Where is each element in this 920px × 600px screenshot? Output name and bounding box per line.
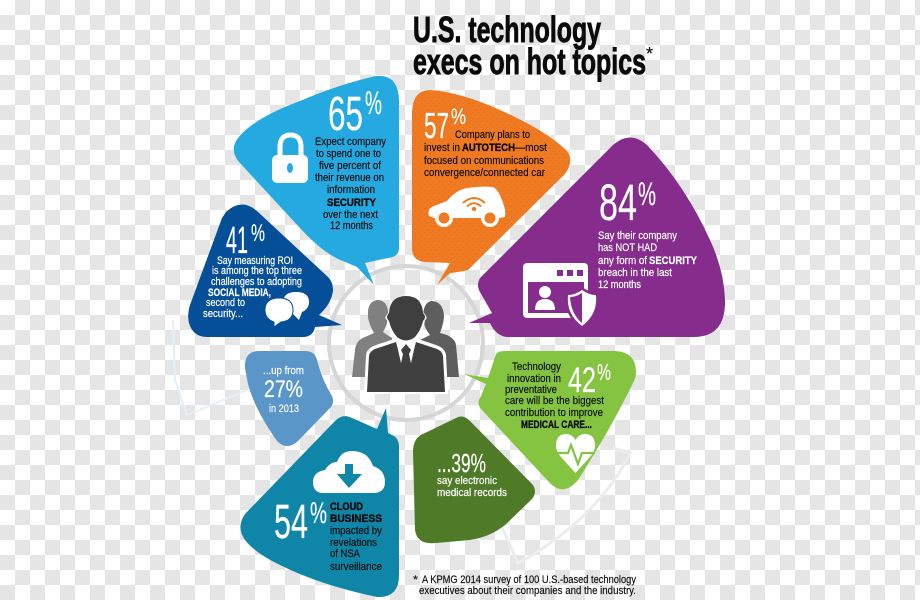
footnote xyxy=(413,574,636,597)
text: autotech: —most xyxy=(515,142,547,154)
text: autotech xyxy=(424,129,547,179)
panel: 54% cloud business xyxy=(240,408,399,597)
stat: 54%: % xyxy=(310,497,327,530)
text: up from 27% in 2013 xyxy=(263,365,304,415)
icon: right executive xyxy=(420,301,459,377)
text: no breach: Say their company xyxy=(598,230,677,242)
text: security spending: five percent of xyxy=(319,160,382,172)
footnote: * xyxy=(413,574,419,586)
stat: 41%: 41 xyxy=(226,220,248,262)
panel: 57% autotech xyxy=(412,90,570,285)
text: security spending: information xyxy=(327,184,375,196)
text: cloud business: of NSA xyxy=(330,548,361,560)
text: security spending xyxy=(315,136,386,232)
stat: 65%: 65 xyxy=(328,88,363,141)
panel: 27% up from xyxy=(245,351,333,446)
text: no breach: has NOT HAD xyxy=(598,242,657,254)
text: electronic medical records: medical records xyxy=(437,487,507,499)
text: security spending: to spend one to xyxy=(316,148,381,160)
text: social media: SOCIAL MEDIA, xyxy=(208,287,271,299)
text: electronic medical records xyxy=(437,448,507,499)
text: autotech: convergence/connected car xyxy=(424,167,545,179)
footnote: executives about their companies and the industry. xyxy=(419,585,636,597)
icon: left executive xyxy=(352,300,392,377)
text: preventative care: Technology xyxy=(512,361,561,373)
icon: speech bubbles xyxy=(265,292,309,327)
icon: browser window with shield xyxy=(523,263,599,329)
icon: connected car xyxy=(429,187,505,227)
text: preventative care: innovation in xyxy=(507,373,561,385)
text: security spending: SECURITY xyxy=(327,197,377,209)
text: electronic medical records: ...39% xyxy=(437,448,486,478)
stat: 42%: 42 xyxy=(568,361,596,400)
text: cloud business xyxy=(330,501,382,573)
text: cloud business: BUSINESS xyxy=(330,513,382,525)
text: security spending: 12 months xyxy=(330,220,373,232)
panel: 65% security xyxy=(234,76,399,285)
title: * xyxy=(646,44,653,64)
stat: 54%: 54 xyxy=(274,496,308,549)
stat: 84%: % xyxy=(638,176,656,212)
text: cloud business: CLOUD xyxy=(330,501,363,513)
text: preventative care: contribution to improve xyxy=(505,407,603,419)
icon: cloud download xyxy=(313,451,385,493)
text: up from 27% in 2013: 27% xyxy=(264,376,303,403)
text: social media: is among the top three xyxy=(212,265,302,277)
text: autotech: AUTOTECH xyxy=(462,142,515,154)
text: preventative care: MEDICAL CARE... xyxy=(521,419,592,431)
icon: heart with pulse xyxy=(556,434,595,473)
text: social media: Say measuring ROI xyxy=(217,255,293,267)
stat: 84%: 84 xyxy=(599,174,637,231)
text: no breach xyxy=(598,230,698,291)
stat: 41%: % xyxy=(251,220,265,247)
text: no breach: any form of xyxy=(598,255,648,267)
text: autotech: focused on communications xyxy=(424,155,544,167)
text: preventative care xyxy=(505,361,604,431)
text: social media: second to xyxy=(206,297,245,309)
text: social media xyxy=(203,255,302,320)
text: security spending: over the next xyxy=(323,209,378,221)
text: up from 27% in 2013: in 2013 xyxy=(269,403,299,415)
center circle with executives xyxy=(329,266,483,420)
stat: 57%: 57 xyxy=(424,105,449,146)
text: preventative care: care will be the biggest xyxy=(505,395,604,407)
text: no breach: SECURITY xyxy=(649,255,698,267)
panel: 41% social media xyxy=(188,204,342,337)
icon: padlock xyxy=(272,135,308,183)
stat: 57%: % xyxy=(451,104,466,129)
text: electronic medical records: say electronic xyxy=(437,475,497,487)
title: execs on hot topics xyxy=(413,41,646,82)
text: no breach: 12 months xyxy=(598,279,641,291)
title: U.S. technology xyxy=(413,9,601,50)
panel: 39% electronic records xyxy=(413,417,535,543)
text: cloud business: impacted by xyxy=(330,525,382,537)
text: security spending: Expect company xyxy=(315,136,386,148)
title xyxy=(413,9,653,82)
text: preventative care: preventative xyxy=(505,384,557,396)
text: social media: challenges to adopting xyxy=(211,276,302,288)
footnote: A KPMG 2014 survey of 100 U.S.-based technology xyxy=(422,574,636,586)
stat: 42%: % xyxy=(597,359,611,385)
panel: 42% medical care xyxy=(464,351,636,489)
text: up from 27% in 2013: ...up from xyxy=(263,365,304,377)
text: security spending: their revenue on xyxy=(315,172,384,184)
text: social media: security... xyxy=(203,308,243,320)
text: cloud business: surveillance xyxy=(330,561,382,573)
text: autotech: Company plans to xyxy=(455,129,530,141)
text: autotech: invest in xyxy=(424,142,460,154)
text: cloud business: revelations xyxy=(330,537,377,549)
stat: 65%: % xyxy=(365,85,382,121)
text: no breach: breach in the last xyxy=(598,267,672,279)
panel: 84% security breach xyxy=(469,138,725,337)
icon: center executive xyxy=(364,295,448,394)
